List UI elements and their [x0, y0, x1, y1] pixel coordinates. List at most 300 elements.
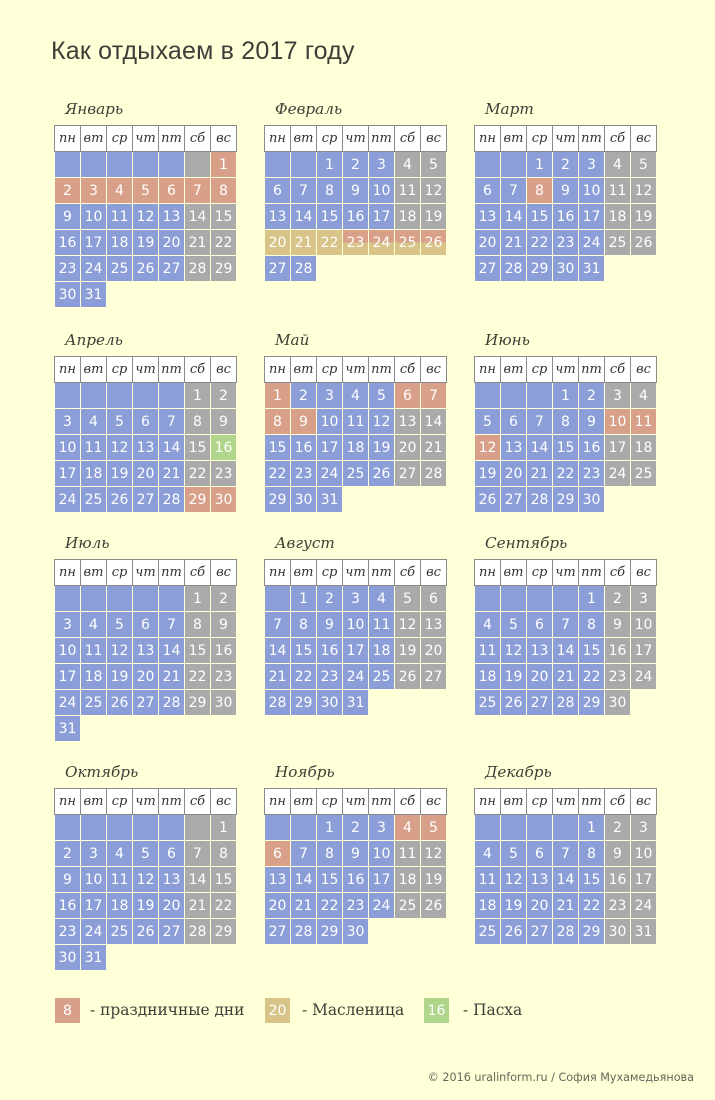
day grid: August: 26	[399, 669, 416, 685]
weekday header: February: вс	[426, 131, 441, 146]
day grid: October: 18	[111, 898, 128, 914]
day grid: May	[265, 383, 446, 512]
day grid: July: 22	[189, 669, 206, 685]
day grid: May: 22	[269, 466, 286, 482]
day grid: September: 14	[557, 643, 574, 659]
day grid: December: 24	[635, 898, 652, 914]
day grid: July: 10	[59, 643, 76, 659]
weekday header: January: пн	[59, 131, 76, 146]
weekday header: July	[54, 559, 237, 586]
day grid: May: 10	[321, 414, 338, 430]
day grid: October: 22	[215, 898, 232, 914]
weekday header: September: сб	[610, 565, 625, 580]
day grid: November: 24	[373, 898, 390, 914]
day grid: August: 9	[325, 617, 334, 633]
day grid: April: 18	[85, 466, 102, 482]
weekday header: August	[264, 559, 447, 586]
weekday header: January: вс	[216, 131, 231, 146]
day grid: March: 24	[583, 235, 600, 251]
day grid: March: 22	[531, 235, 548, 251]
day grid: February: 26	[425, 235, 442, 251]
heading: February: Февраль	[275, 100, 342, 118]
day grid: January: 13	[163, 209, 180, 225]
day grid: July: 24	[59, 695, 76, 711]
weekday header: November: вт	[294, 794, 313, 809]
weekday header: April: ср	[112, 362, 127, 377]
day grid: November: 11	[399, 846, 416, 862]
day grid: May: 27	[399, 466, 416, 482]
day grid: October: 20	[163, 898, 180, 914]
day grid: February: 18	[399, 209, 416, 225]
weekday header: June: ср	[532, 362, 547, 377]
weekday header: October: сб	[190, 794, 205, 809]
day grid: October: 9	[63, 872, 72, 888]
day grid: March: 18	[609, 209, 626, 225]
legend swatch: holidays	[55, 998, 80, 1023]
day grid: June: 8	[561, 414, 570, 430]
weekday header: January: пт	[161, 131, 182, 146]
day grid: February: 4	[403, 157, 412, 173]
heading: May: Май	[275, 331, 309, 349]
weekday header: March: пн	[479, 131, 496, 146]
day grid: February: 16	[347, 209, 364, 225]
weekday header: February	[264, 125, 447, 152]
day grid: January: 25	[111, 261, 128, 277]
day grid: March: 19	[635, 209, 652, 225]
day grid: July: 5	[115, 617, 124, 633]
day grid: July: 13	[137, 643, 154, 659]
day grid: May: 5	[377, 388, 386, 404]
day grid: May: 21	[425, 440, 442, 456]
day grid: September: 20	[531, 669, 548, 685]
weekday header: December: ср	[532, 794, 547, 809]
day grid: October: 6	[167, 846, 176, 862]
day grid: November: 23	[347, 898, 364, 914]
panel: April	[54, 331, 237, 512]
day grid: November: 25	[399, 898, 416, 914]
day grid: June: 16	[583, 440, 600, 456]
day grid: June: 25	[635, 466, 652, 482]
weekday header: May: пт	[371, 362, 392, 377]
day grid: September: 23	[609, 669, 626, 685]
day grid: September: 6	[535, 617, 544, 633]
day grid: January: 16	[59, 235, 76, 251]
day grid: September: 21	[557, 669, 574, 685]
day grid: October: 13	[163, 872, 180, 888]
panel: September	[474, 534, 657, 715]
day grid: May: 28	[425, 466, 442, 482]
day grid: March: 5	[639, 157, 648, 173]
weekday header: September: чт	[555, 565, 576, 580]
day grid: January: 29	[215, 261, 232, 277]
day grid: July: 2	[219, 591, 228, 607]
day grid: November: 17	[373, 872, 390, 888]
weekday header: February: пн	[269, 131, 286, 146]
legend swatch: Maslenitsa: 20	[269, 1003, 286, 1019]
day grid: July: 8	[193, 617, 202, 633]
day grid: February: 8	[325, 183, 334, 199]
weekday header: December: чт	[555, 794, 576, 809]
weekday header: July: сб	[190, 565, 205, 580]
day grid: September: 9	[613, 617, 622, 633]
day grid: February: 13	[269, 209, 286, 225]
day grid: June: 4	[639, 388, 648, 404]
day grid: December: 15	[583, 872, 600, 888]
day grid: December: 17	[635, 872, 652, 888]
weekday header: May: вт	[294, 362, 313, 377]
weekday header: August: вс	[426, 565, 441, 580]
day grid: October: 14	[189, 872, 206, 888]
heading: August: Август	[275, 534, 335, 552]
weekday header: March: чт	[555, 131, 576, 146]
heading: March: Март	[485, 100, 534, 118]
day grid: August: 10	[347, 617, 364, 633]
day grid: June: 22	[557, 466, 574, 482]
day grid: July	[55, 586, 236, 741]
day grid: August	[265, 586, 446, 715]
weekday header: May: ср	[322, 362, 337, 377]
day grid: August: 2	[325, 591, 334, 607]
day grid: April: 24	[59, 492, 76, 508]
day grid: May: 30	[295, 492, 312, 508]
day grid: July: 11	[85, 643, 102, 659]
day grid: May: 14	[425, 414, 442, 430]
day grid: March: 13	[479, 209, 496, 225]
panel: October	[54, 763, 237, 970]
weekday header: September	[474, 559, 657, 586]
day grid: April: 7	[167, 414, 176, 430]
day grid: July: 31	[59, 721, 76, 737]
day grid: March: 17	[583, 209, 600, 225]
day grid: September: 1	[587, 591, 596, 607]
day grid: September: 11	[479, 643, 496, 659]
day grid: December: 31	[635, 924, 652, 940]
day grid: May: 2	[299, 388, 308, 404]
day grid: January: 20	[163, 235, 180, 251]
day grid: December: 3	[639, 820, 648, 836]
day grid: November: 4	[403, 820, 412, 836]
day grid: December: 29	[583, 924, 600, 940]
day grid: August: 3	[351, 591, 360, 607]
day grid: December: 18	[479, 898, 496, 914]
day grid: December: 10	[635, 846, 652, 862]
day grid: May: 19	[373, 440, 390, 456]
day grid: December: 27	[531, 924, 548, 940]
day grid: December: 5	[509, 846, 518, 862]
panel: January	[54, 100, 237, 307]
day grid: May: 4	[351, 388, 360, 404]
day grid: March	[475, 152, 656, 281]
day grid: August: 24	[347, 669, 364, 685]
day grid: March: 20	[479, 235, 496, 251]
day grid: December: 16	[609, 872, 626, 888]
weekday header: July: вс	[216, 565, 231, 580]
day grid: October: 1	[219, 820, 228, 836]
day grid: June: 21	[531, 466, 548, 482]
day grid: November: 13	[269, 872, 286, 888]
day grid: March: 15	[531, 209, 548, 225]
day grid: February: 10	[373, 183, 390, 199]
weekday header: November: сб	[400, 794, 415, 809]
weekday header: June: пт	[581, 362, 602, 377]
day grid: July: 23	[215, 669, 232, 685]
day grid: March: 28	[505, 261, 522, 277]
day grid: July: 27	[137, 695, 154, 711]
day grid: April: 25	[85, 492, 102, 508]
legend swatch: Easter	[424, 998, 449, 1023]
day grid: July: 26	[111, 695, 128, 711]
day grid: January: 31	[85, 287, 102, 303]
day grid: November: 22	[321, 898, 338, 914]
day grid: April: 17	[59, 466, 76, 482]
title: Как отдыхаем в 2017 году	[51, 37, 355, 65]
day grid: November: 14	[295, 872, 312, 888]
day grid: November: 10	[373, 846, 390, 862]
day grid: August: 6	[429, 591, 438, 607]
day grid: June: 23	[583, 466, 600, 482]
day grid: April	[55, 383, 236, 512]
day grid: October: 26	[137, 924, 154, 940]
day grid: August: 12	[399, 617, 416, 633]
day grid: May: 31	[321, 492, 338, 508]
day grid: January: 8	[219, 183, 228, 199]
day grid: November: 28	[295, 924, 312, 940]
day grid: February: 20	[269, 235, 286, 251]
weekday header: November: вс	[426, 794, 441, 809]
weekday header: May: вс	[426, 362, 441, 377]
day grid: March: 7	[509, 183, 518, 199]
day grid: September: 22	[583, 669, 600, 685]
day grid: November: 1	[325, 820, 334, 836]
day grid: July: 15	[189, 643, 206, 659]
day grid: January: 4	[115, 183, 124, 199]
day grid: March: 27	[479, 261, 496, 277]
day grid: October: 4	[115, 846, 124, 862]
weekday header: May: пн	[269, 362, 286, 377]
day grid: October: 2	[63, 846, 72, 862]
day grid: April: 27	[137, 492, 154, 508]
day grid: October: 8	[219, 846, 228, 862]
day grid: August: 21	[269, 669, 286, 685]
day grid: June: 24	[609, 466, 626, 482]
day grid: May: 6	[403, 388, 412, 404]
day grid: September: 18	[479, 669, 496, 685]
panel: December	[474, 763, 657, 944]
weekday header: July: пн	[59, 565, 76, 580]
day grid: October: 15	[215, 872, 232, 888]
weekday header: January	[54, 125, 237, 152]
day grid: December: 1	[587, 820, 596, 836]
heading: July: Июль	[65, 534, 110, 552]
heading: September: Сентябрь	[485, 534, 567, 552]
day grid: April: 26	[111, 492, 128, 508]
day grid: October: 11	[111, 872, 128, 888]
day grid: August: 7	[273, 617, 282, 633]
legend swatch: holidays: 8	[63, 1003, 72, 1019]
day grid: October: 30	[59, 950, 76, 966]
heading: June: Июнь	[485, 331, 530, 349]
day grid: August: 30	[321, 695, 338, 711]
weekday header: August: вт	[294, 565, 313, 580]
day grid: September: 4	[483, 617, 492, 633]
day grid: December: 11	[479, 872, 496, 888]
day grid: April: 11	[85, 440, 102, 456]
day grid: May: 7	[429, 388, 438, 404]
day grid: May: 20	[399, 440, 416, 456]
day grid: December: 25	[479, 924, 496, 940]
day grid: December: 9	[613, 846, 622, 862]
weekday header: October: пт	[161, 794, 182, 809]
day grid: December: 22	[583, 898, 600, 914]
day grid: August: 15	[295, 643, 312, 659]
day grid: October: 3	[89, 846, 98, 862]
day grid: June: 3	[613, 388, 622, 404]
day grid: August: 23	[321, 669, 338, 685]
day grid: September: 12	[505, 643, 522, 659]
weekday header: August: чт	[345, 565, 366, 580]
day grid: February: 7	[299, 183, 308, 199]
weekday header: November: чт	[345, 794, 366, 809]
day grid: March: 2	[561, 157, 570, 173]
day grid: January: 10	[85, 209, 102, 225]
day grid: December: 30	[609, 924, 626, 940]
day grid: November	[265, 815, 446, 944]
day grid: May: 12	[373, 414, 390, 430]
day grid: June: 30	[583, 492, 600, 508]
day grid: April: 5	[115, 414, 124, 430]
weekday header: August: ср	[322, 565, 337, 580]
day grid: May: 18	[347, 440, 364, 456]
day grid: August: 5	[403, 591, 412, 607]
day grid: December: 4	[483, 846, 492, 862]
day grid: February: 25	[399, 235, 416, 251]
weekday header: March: вс	[636, 131, 651, 146]
weekday header: November	[264, 788, 447, 815]
day grid: December: 28	[557, 924, 574, 940]
day grid: July: 30	[215, 695, 232, 711]
panel: March	[474, 100, 657, 281]
weekday header: November: ср	[322, 794, 337, 809]
weekday header: April	[54, 356, 237, 383]
weekday header: June: сб	[610, 362, 625, 377]
day grid: October: 25	[111, 924, 128, 940]
day grid: January: 27	[163, 261, 180, 277]
weekday header: October: вт	[84, 794, 103, 809]
day grid: January: 24	[85, 261, 102, 277]
day grid: September: 17	[635, 643, 652, 659]
day grid: September: 25	[479, 695, 496, 711]
panel: November	[264, 763, 447, 944]
day grid: April: 9	[219, 414, 228, 430]
weekday header: December	[474, 788, 657, 815]
day grid: May: 8	[273, 414, 282, 430]
day grid: May: 15	[269, 440, 286, 456]
weekday header: August: сб	[400, 565, 415, 580]
day grid: June: 7	[535, 414, 544, 430]
day grid: April: 19	[111, 466, 128, 482]
weekday header: October: чт	[135, 794, 156, 809]
day grid: January: 2	[63, 183, 72, 199]
day grid: August: 14	[269, 643, 286, 659]
day grid: March: 16	[557, 209, 574, 225]
day grid: November: 21	[295, 898, 312, 914]
day grid: December	[475, 815, 656, 944]
day grid: April: 28	[163, 492, 180, 508]
day grid: October: 16	[59, 898, 76, 914]
weekday header: February: пт	[371, 131, 392, 146]
day grid: March: 3	[587, 157, 596, 173]
day grid: February: 12	[425, 183, 442, 199]
weekday header: October: вс	[216, 794, 231, 809]
weekday header: June: вт	[504, 362, 523, 377]
day grid: July: 3	[63, 617, 72, 633]
day grid: December: 23	[609, 898, 626, 914]
weekday header: November: пн	[269, 794, 286, 809]
day grid: January: 3	[89, 183, 98, 199]
day grid: March: 4	[613, 157, 622, 173]
day grid: October: 10	[85, 872, 102, 888]
day grid: June: 14	[531, 440, 548, 456]
day grid: September: 24	[635, 669, 652, 685]
weekday header: June: вс	[636, 362, 651, 377]
weekday header: April: вс	[216, 362, 231, 377]
weekday header: April: вт	[84, 362, 103, 377]
day grid: August: 18	[373, 643, 390, 659]
day grid: November: 9	[351, 846, 360, 862]
legend label: holidays: - праздничные дни	[90, 1001, 244, 1019]
day grid: July: 21	[163, 669, 180, 685]
weekday header: December: пн	[479, 794, 496, 809]
day grid: February: 21	[295, 235, 312, 251]
day grid: March: 29	[531, 261, 548, 277]
day grid: March: 6	[483, 183, 492, 199]
heading: January: Январь	[65, 100, 123, 118]
day grid: August: 22	[295, 669, 312, 685]
day grid: May: 23	[295, 466, 312, 482]
day grid: November: 5	[429, 820, 438, 836]
day grid: August: 25	[373, 669, 390, 685]
day grid: June: 29	[557, 492, 574, 508]
weekday header: February: ср	[322, 131, 337, 146]
weekday header: July: вт	[84, 565, 103, 580]
day grid: July: 17	[59, 669, 76, 685]
day grid: January: 22	[215, 235, 232, 251]
copyright: © 2016 uralinform.ru / София Мухамедьянова	[428, 1071, 694, 1084]
day grid: February: 28	[295, 261, 312, 277]
day grid: June: 27	[505, 492, 522, 508]
day grid: March: 12	[635, 183, 652, 199]
day grid: May: 26	[373, 466, 390, 482]
day grid: July: 28	[163, 695, 180, 711]
day grid: September: 16	[609, 643, 626, 659]
weekday header: August: пт	[371, 565, 392, 580]
heading: April: Апрель	[65, 331, 123, 349]
day grid: February: 17	[373, 209, 390, 225]
day grid: September: 26	[505, 695, 522, 711]
day grid: May: 17	[321, 440, 338, 456]
day grid: September: 7	[561, 617, 570, 633]
weekday header: October: ср	[112, 794, 127, 809]
panel: July	[54, 534, 237, 741]
day grid: March: 30	[557, 261, 574, 277]
day grid: December: 12	[505, 872, 522, 888]
day grid: August: 27	[425, 669, 442, 685]
day grid: October: 27	[163, 924, 180, 940]
day grid: August: 19	[399, 643, 416, 659]
day grid: October: 24	[85, 924, 102, 940]
day grid: December: 13	[531, 872, 548, 888]
day grid: October: 19	[137, 898, 154, 914]
